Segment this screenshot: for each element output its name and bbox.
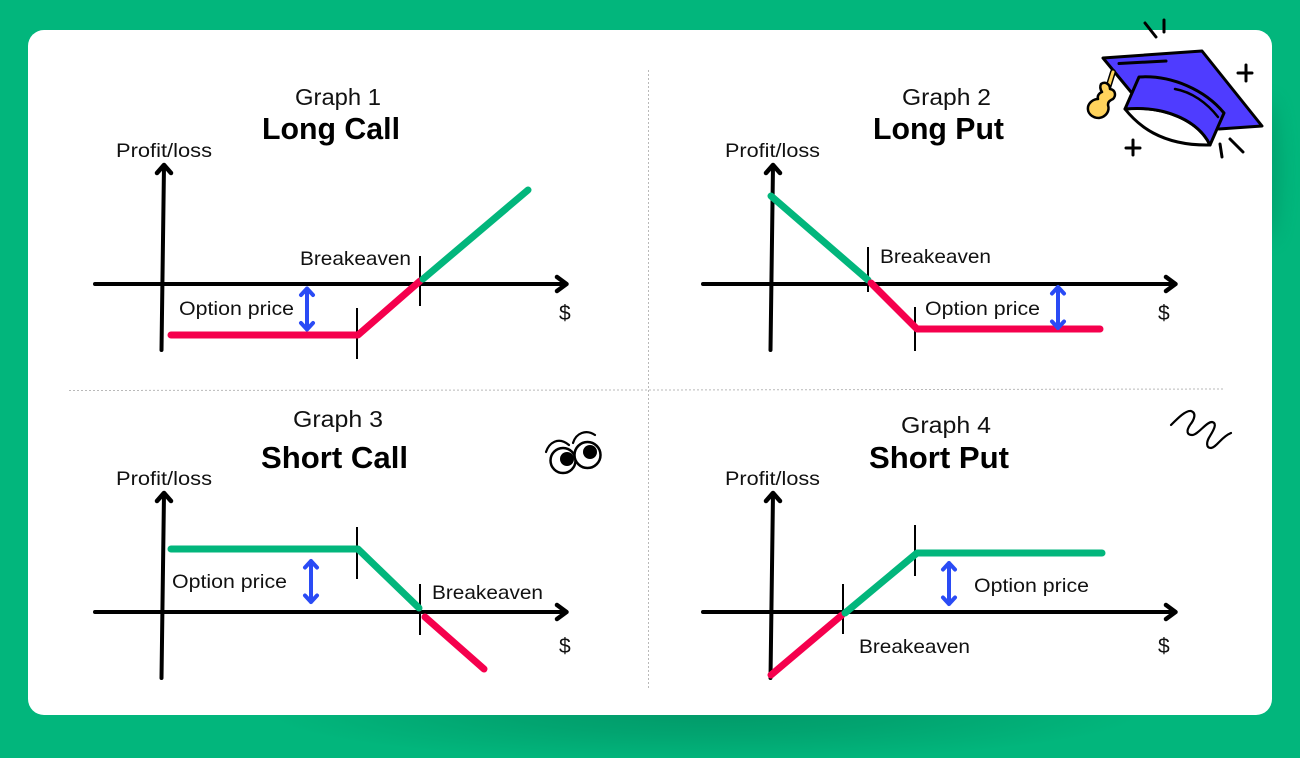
dollar label: $ [1158, 302, 1170, 325]
icon: graduation cap [1088, 20, 1262, 157]
blue double arrow [301, 288, 313, 330]
green profit line [171, 549, 419, 608]
blue double arrow [1052, 287, 1064, 328]
y axis label: Profit/loss [116, 468, 212, 490]
heading: short call: Short Call [261, 440, 408, 475]
graph 1 label: Graph 1 [295, 84, 381, 110]
arrow heads [766, 493, 1176, 619]
panel: graph 2 long put [703, 84, 1176, 351]
arrow heads [157, 493, 566, 619]
green profit line [771, 196, 868, 280]
dollar label: $ [559, 635, 571, 658]
y axis label: Profit/loss [725, 140, 820, 162]
red loss line [425, 617, 484, 669]
blue double arrow [305, 561, 317, 602]
green profit line [423, 190, 528, 279]
option price label: Option price [179, 298, 294, 320]
arrow heads [157, 165, 566, 291]
red loss line [171, 281, 420, 335]
axes [703, 494, 1174, 678]
y axis label: Profit/loss [116, 140, 212, 162]
dollar label: $ [559, 302, 571, 325]
option price label: Option price [925, 298, 1040, 320]
dotted dividers [69, 70, 1223, 690]
panel: graph 4 short put [703, 412, 1176, 678]
graph 4 label: Graph 4 [901, 412, 991, 438]
tick marks [843, 525, 915, 634]
graph 2 label: Graph 2 [902, 84, 991, 110]
axes [95, 494, 565, 678]
tick marks [868, 247, 915, 351]
dollar label: $ [1158, 635, 1170, 658]
axes [703, 166, 1174, 350]
icon: cartoon eyes [546, 432, 600, 473]
breakeven label: Breakeaven [300, 248, 411, 270]
graph 3 label: Graph 3 [293, 406, 383, 432]
red loss line [771, 615, 842, 675]
panel: graph 3 short call [95, 406, 571, 678]
red loss line [871, 283, 1100, 329]
axes [95, 166, 565, 350]
option price label: Option price [974, 575, 1089, 597]
tick marks [357, 527, 420, 635]
breakeven label: Breakeaven [859, 636, 970, 658]
tick marks [357, 256, 420, 359]
heading: long call: Long Call [262, 111, 400, 146]
panel: graph 1 long call [95, 84, 571, 359]
icon: squiggle [1171, 411, 1231, 448]
green profit line [845, 553, 1102, 613]
card shadow [265, 100, 1280, 758]
arrow heads [766, 165, 1176, 291]
breakeven label: Breakeaven [432, 582, 543, 604]
option price label: Option price [172, 571, 287, 593]
y axis label: Profit/loss [725, 468, 820, 490]
blue double arrow [943, 563, 955, 604]
heading: long put: Long Put [873, 111, 1004, 146]
breakeven label: Breakeaven [880, 246, 991, 268]
heading: short put: Short Put [869, 440, 1009, 475]
